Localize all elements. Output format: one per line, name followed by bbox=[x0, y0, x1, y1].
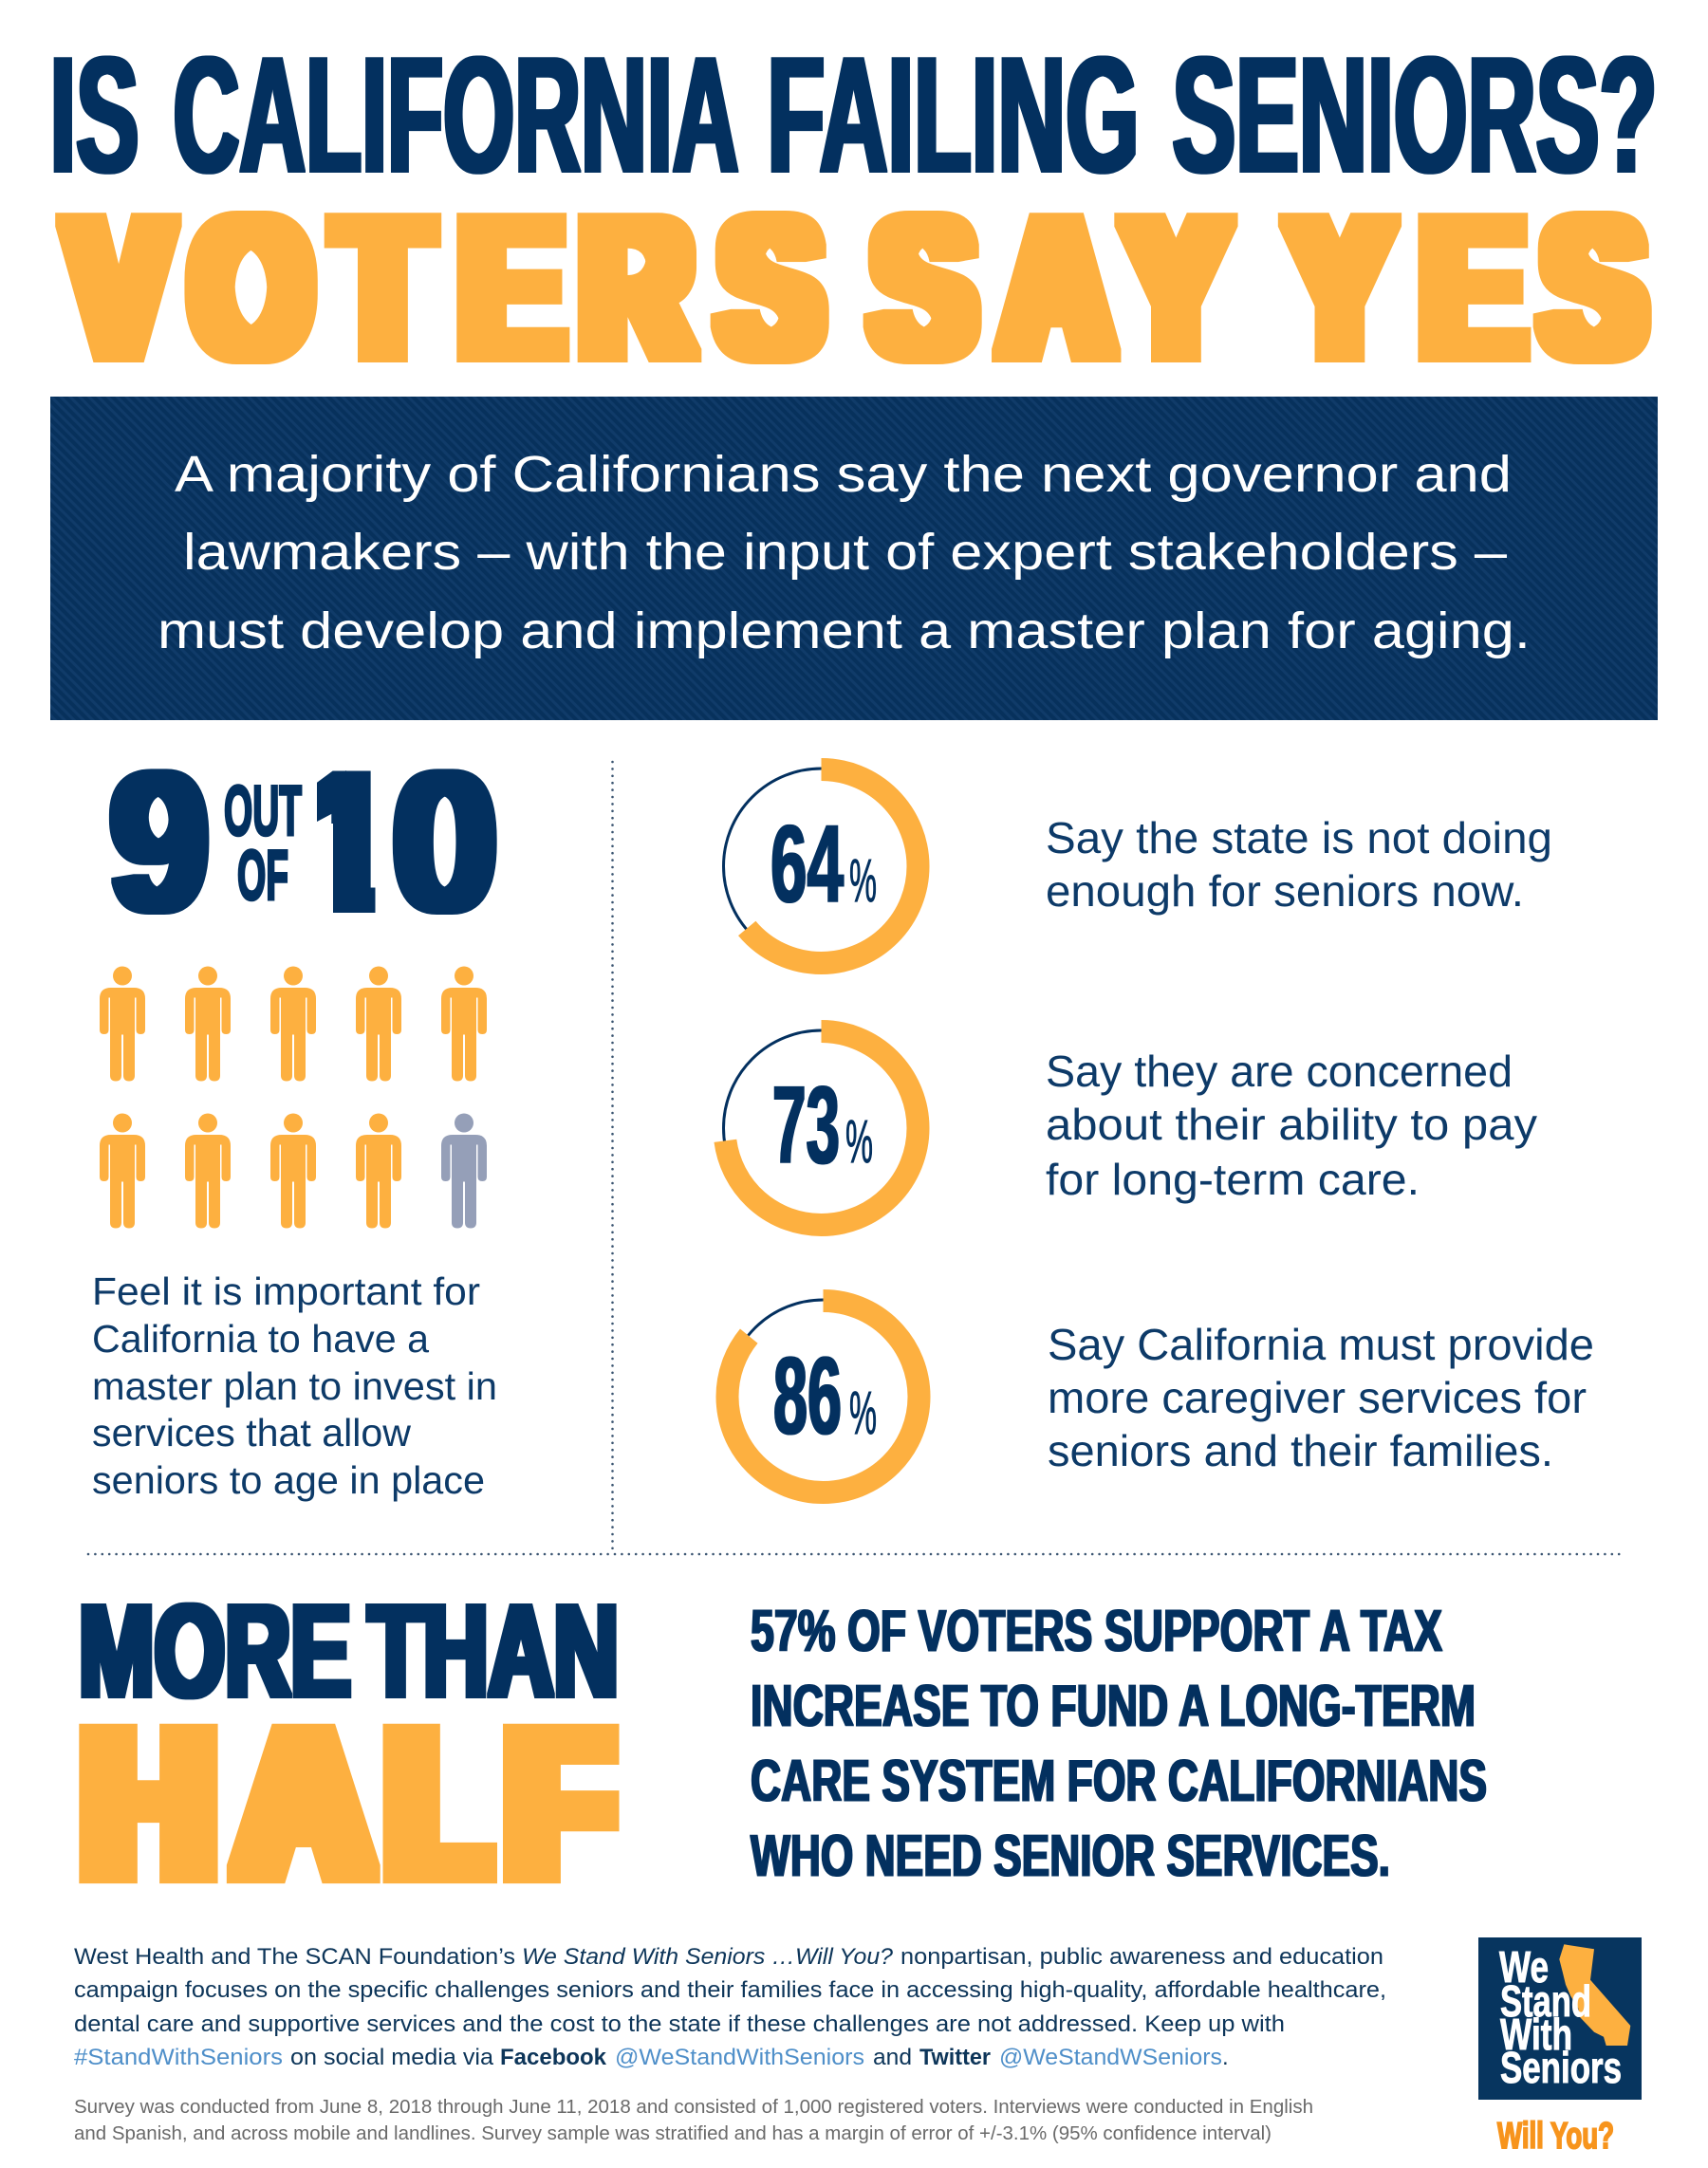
text: state not doing enough: Say the state is not doing bbox=[1046, 813, 1552, 862]
headline: voters say yes: VOTERS bbox=[68, 177, 821, 398]
headline: voters say yes: SAY bbox=[873, 177, 1226, 398]
text: campaign description: West Health and The SCAN Foundation’s bbox=[74, 1944, 515, 1970]
donut chart: 64 percent: % bbox=[849, 846, 877, 915]
text: tax increase support: 57% OF VOTERS SUPPORT A TAX bbox=[751, 1599, 1442, 1664]
tagline: will you: Will You? bbox=[1497, 2116, 1614, 2157]
text: campaign description bbox=[74, 1944, 1386, 2070]
title: is California failing seniors: CALIFORNIA bbox=[173, 22, 738, 207]
donut chart: 73 percent: 73 bbox=[772, 1063, 840, 1186]
text: state not doing enough bbox=[1046, 813, 1552, 916]
donut chart: 86 percent: % bbox=[849, 1379, 877, 1447]
text: campaign description: . bbox=[1222, 2045, 1229, 2070]
headline: voters say yes: YES bbox=[1290, 177, 1643, 398]
heading: more than: MORE bbox=[79, 1579, 351, 1725]
text: master plan importance: seniors to age in place bbox=[92, 1458, 485, 1502]
text: campaign description: @WeStandWithSeniors bbox=[615, 2045, 864, 2070]
text: master plan importance: Feel it is important for bbox=[92, 1269, 480, 1313]
donut chart: 73 percent bbox=[723, 1030, 919, 1226]
text: campaign description: and bbox=[873, 2045, 912, 2070]
stat: 9 out of 10: OF bbox=[237, 836, 288, 915]
text: campaign description: Facebook bbox=[500, 2045, 607, 2070]
donut chart: 64 percent bbox=[723, 769, 919, 964]
panel: master plan statement: lawmakers – with the input of expert stakeholders – bbox=[183, 524, 1507, 581]
stat: 9 out of 10: 9 bbox=[111, 730, 208, 953]
text: campaign description: nonpartisan, public awareness and education bbox=[900, 1944, 1383, 1970]
text: survey methodology: Survey was conducted from June 8, 2018 through June 11, 2018 and consisted of 1,000 registered voters. Interviews were conducted in English bbox=[74, 2096, 1313, 2118]
icon: person row two bbox=[100, 1114, 401, 1228]
donut chart: 86 percent bbox=[727, 1300, 920, 1493]
headline: voters say yes bbox=[68, 177, 1643, 398]
text: master plan importance bbox=[92, 1269, 497, 1502]
icon: person row one bbox=[100, 966, 487, 1082]
panel: master plan statement: must develop and implement a master plan for aging. bbox=[158, 602, 1531, 659]
text: long-term care concern bbox=[1046, 1047, 1537, 1204]
logo wordmark bbox=[1499, 1942, 1622, 2092]
icon: California state shape bbox=[1559, 1944, 1630, 2046]
text: long-term care concern: Say they are concerned bbox=[1046, 1047, 1513, 1096]
stat: 9 out of 10: 1 bbox=[298, 730, 396, 953]
text: long-term care concern: about their ability to pay bbox=[1046, 1100, 1537, 1149]
text: master plan importance: services that allow bbox=[92, 1411, 411, 1455]
text: campaign description: #StandWithSeniors bbox=[74, 2045, 283, 2070]
text: campaign description: We Stand With Seniors …Will You? bbox=[522, 1944, 894, 1970]
logo wordmark: Seniors bbox=[1500, 2043, 1622, 2092]
logo wordmark: We bbox=[1499, 1942, 1549, 1992]
logo: we stand with seniors bbox=[1478, 1937, 1642, 2100]
stat: 9 out of 10 bbox=[111, 730, 497, 954]
text: campaign description: on social media via bbox=[290, 2045, 494, 2070]
logo wordmark: With bbox=[1500, 2010, 1572, 2059]
title: is California failing seniors bbox=[49, 22, 1657, 207]
donut chart: 64 percent: 64 bbox=[770, 803, 844, 926]
text: caregiver services: seniors and their families. bbox=[1048, 1426, 1553, 1475]
text: master plan importance: master plan to invest in bbox=[92, 1364, 497, 1408]
text: state not doing enough: enough for seniors now. bbox=[1046, 866, 1524, 916]
text: caregiver services: more caregiver services for bbox=[1048, 1373, 1587, 1422]
stat: 9 out of 10: OUT bbox=[224, 771, 302, 850]
text: tax increase support bbox=[751, 1599, 1487, 1889]
text: tax increase support: WHO NEED SENIOR SERVICES. bbox=[751, 1824, 1390, 1889]
heading: half: HALF bbox=[84, 1689, 617, 1918]
stat: 9 out of 10: 0 bbox=[393, 732, 497, 954]
pictogram: nine of ten people bbox=[100, 966, 487, 1228]
donut chart: 86 percent: 86 bbox=[773, 1334, 842, 1457]
heading: more than: THAN bbox=[368, 1579, 619, 1725]
text: long-term care concern: for long-term care. bbox=[1046, 1155, 1420, 1204]
panel: master plan statement: A majority of Californians say the next governor and bbox=[175, 446, 1512, 503]
text: caregiver services bbox=[1048, 1320, 1594, 1475]
icon: grey person bbox=[441, 1114, 487, 1228]
text: master plan importance: California to have a bbox=[92, 1317, 429, 1361]
title: is California failing seniors: FAILING bbox=[767, 22, 1139, 207]
text: campaign description: campaign focuses on the specific challenges seniors and their families face in accessing high-quality, affordable healthcare, bbox=[74, 1977, 1386, 2003]
logo wordmark: Stand bbox=[1500, 1976, 1591, 2026]
title: is California failing seniors: IS bbox=[49, 22, 139, 207]
text: campaign description: Twitter bbox=[919, 2045, 991, 2070]
text: survey methodology bbox=[74, 2096, 1313, 2144]
text: caregiver services: Say California must provide bbox=[1048, 1320, 1594, 1369]
panel: master plan statement bbox=[50, 397, 1658, 720]
text: campaign description: @WeStandWSeniors bbox=[999, 2045, 1222, 2070]
text: survey methodology: and Spanish, and across mobile and landlines. Survey sample was stratified and has a margin of error of +/-3.1% (95% confidence interval) bbox=[74, 2122, 1272, 2144]
donut chart: 73 percent: % bbox=[845, 1107, 873, 1176]
text: campaign description: dental care and supportive services and the cost to the state if these challenges are not addressed. Keep up with bbox=[74, 2011, 1285, 2037]
